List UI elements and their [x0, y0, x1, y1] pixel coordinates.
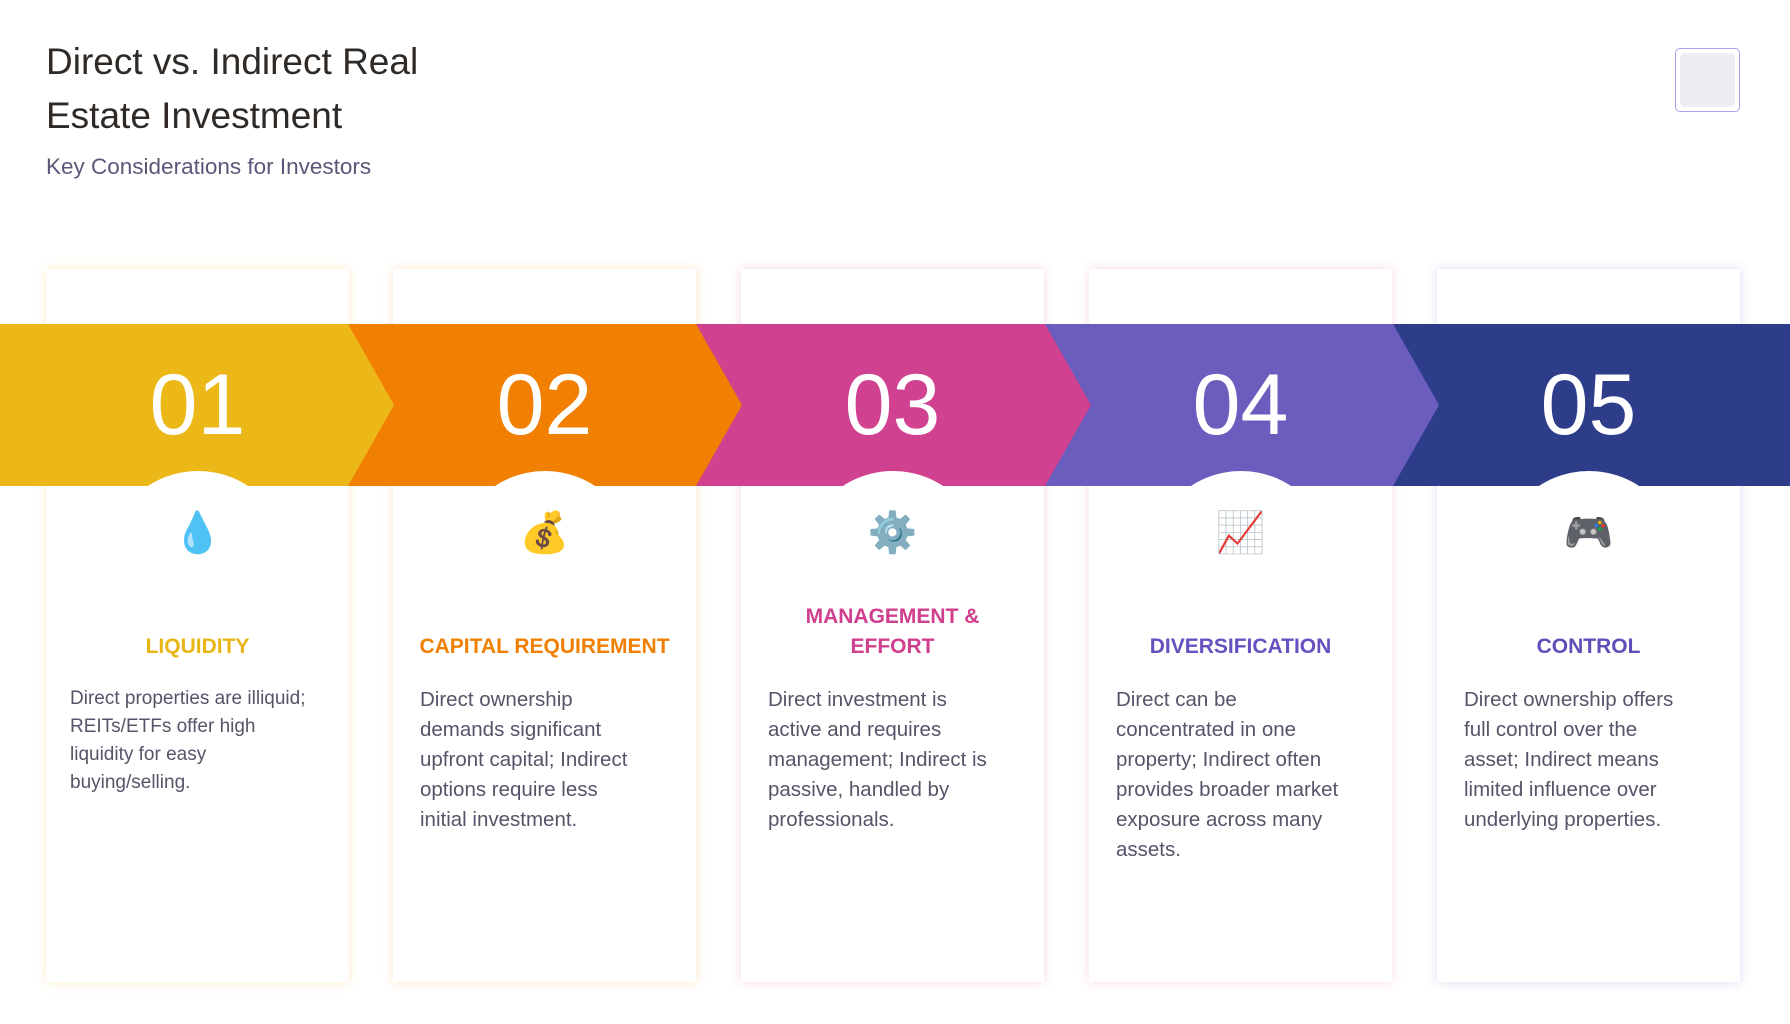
panel: 02 capital requirement: initial investment. [420, 808, 577, 831]
panel: 03 management & effort: professionals. [768, 808, 894, 831]
panel: 04 diversification: exposure across many [1116, 808, 1322, 831]
panel: 04 diversification: concentrated in one [1116, 718, 1296, 741]
panel: 02 capital requirement: 02 [497, 357, 592, 453]
panel: 04 diversification: 04 [1193, 357, 1288, 453]
panel: 02 capital requirement: demands significant [420, 718, 601, 741]
panel: 05 control: CONTROL [1537, 635, 1640, 658]
panel: 05 control: limited influence over [1464, 778, 1657, 801]
panel: 04 diversification [1116, 357, 1338, 861]
panel: 01 liquidity [70, 357, 306, 793]
panel: 02 capital requirement: CAPITAL REQUIREMENT [419, 635, 670, 658]
panel: 01 liquidity: REITs/ETFs offer high [70, 716, 256, 737]
panel: 03 management & effort: MANAGEMENT & EFFORT [806, 605, 979, 658]
panel: 01 liquidity: 01 [150, 357, 245, 453]
panel: 03 management & effort: 03 [845, 357, 940, 453]
panel: 04 diversification: assets. [1116, 838, 1181, 861]
panel: 05 control: 🎮 [1564, 511, 1613, 555]
panel: 03 management & effort: ⚙️ [868, 511, 917, 555]
panel: 02 capital requirement: upfront capital; Indirect [420, 748, 627, 771]
title: Direct vs. Indirect Real [46, 41, 418, 82]
panel: 04 diversification: provides broader market [1116, 778, 1338, 801]
panel: 03 management & effort: management; Indirect is [768, 748, 987, 771]
panel: 03 management & effort: Direct investment is [768, 688, 947, 711]
panel: 01 liquidity: buying/selling. [70, 772, 190, 793]
panel: 05 control: Direct ownership offers [1464, 688, 1673, 711]
panel: 01 liquidity: Direct properties are illiquid; [70, 688, 306, 709]
panel: 01 liquidity: 💧 [173, 511, 222, 555]
panel: 03 management & effort: active and requires [768, 718, 941, 741]
top-right button [1675, 48, 1740, 112]
panel: 05 control [1464, 357, 1673, 831]
panel: 02 capital requirement: Direct ownership [420, 688, 573, 711]
panel: 03 management & effort: passive, handled by [768, 778, 949, 801]
subtitle: Key Considerations for Investors [46, 154, 371, 179]
panel: 04 diversification: property; Indirect often [1116, 748, 1321, 771]
panel: 02 capital requirement [419, 357, 670, 831]
panel: 05 control: underlying properties. [1464, 808, 1661, 831]
panel: 03 management & effort [768, 357, 987, 831]
panel: 05 control: 05 [1541, 357, 1636, 453]
panel: 02 capital requirement: 💰 [520, 511, 569, 555]
panel: 05 control: asset; Indirect means [1464, 748, 1659, 771]
panel: 01 liquidity: LIQUIDITY [146, 635, 249, 658]
panel: 04 diversification: 📈 [1216, 511, 1265, 555]
panel: 04 diversification: Direct can be [1116, 688, 1237, 711]
title: Estate Investment [46, 95, 342, 136]
title [46, 41, 418, 136]
panel: 04 diversification: DIVERSIFICATION [1150, 635, 1331, 658]
panel: 02 capital requirement: options require less [420, 778, 598, 801]
panel: 01 liquidity: liquidity for easy [70, 744, 206, 765]
panel: 05 control: full control over the [1464, 718, 1637, 741]
